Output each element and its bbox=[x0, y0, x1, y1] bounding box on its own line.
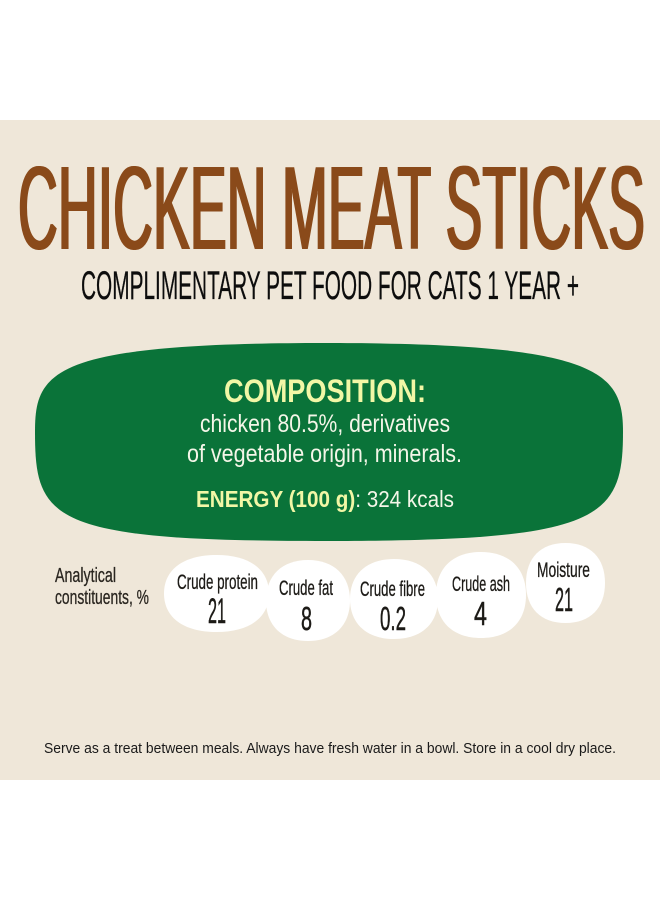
bubble: crude fat bbox=[266, 560, 350, 641]
bubble: moisture: 21 bbox=[555, 581, 573, 618]
composition text: chicken 80.5%, derivatives bbox=[200, 410, 450, 438]
bubble: crude ash: Crude ash bbox=[452, 573, 510, 596]
bubble: crude protein: Crude protein bbox=[177, 571, 258, 594]
analytical constituents label bbox=[55, 565, 149, 609]
composition heading: COMPOSITION: bbox=[224, 373, 426, 409]
analytical constituents label: Analytical bbox=[55, 565, 116, 587]
bubble: crude protein bbox=[164, 555, 269, 632]
green blob bbox=[35, 343, 623, 541]
composition text bbox=[187, 410, 462, 468]
bubble: crude fibre bbox=[350, 559, 438, 639]
composition text: of vegetable origin, minerals. bbox=[187, 440, 462, 468]
panel: composition bbox=[35, 343, 623, 541]
bubble: moisture bbox=[526, 543, 605, 623]
bubble: crude fibre: 0.2 bbox=[380, 600, 406, 637]
bubble: crude ash bbox=[436, 552, 526, 638]
analytical constituents label: constituents, % bbox=[55, 587, 149, 609]
bubble: crude ash: 4 bbox=[474, 595, 487, 632]
bubble: crude fibre: Crude fibre bbox=[360, 578, 425, 601]
footer note: Serve as a treat between meals. Always have fresh water in a bowl. Store in a cool dry place. bbox=[44, 741, 616, 757]
bubble: moisture: Moisture bbox=[537, 559, 590, 582]
energy line: ENERGY (100 g): 324 kcals bbox=[196, 486, 454, 512]
bubble: crude protein: 21 bbox=[208, 592, 226, 631]
bubble: crude fat: 8 bbox=[301, 600, 312, 637]
bubble: crude fat: Crude fat bbox=[279, 577, 333, 600]
panel: beige background bbox=[0, 120, 660, 780]
